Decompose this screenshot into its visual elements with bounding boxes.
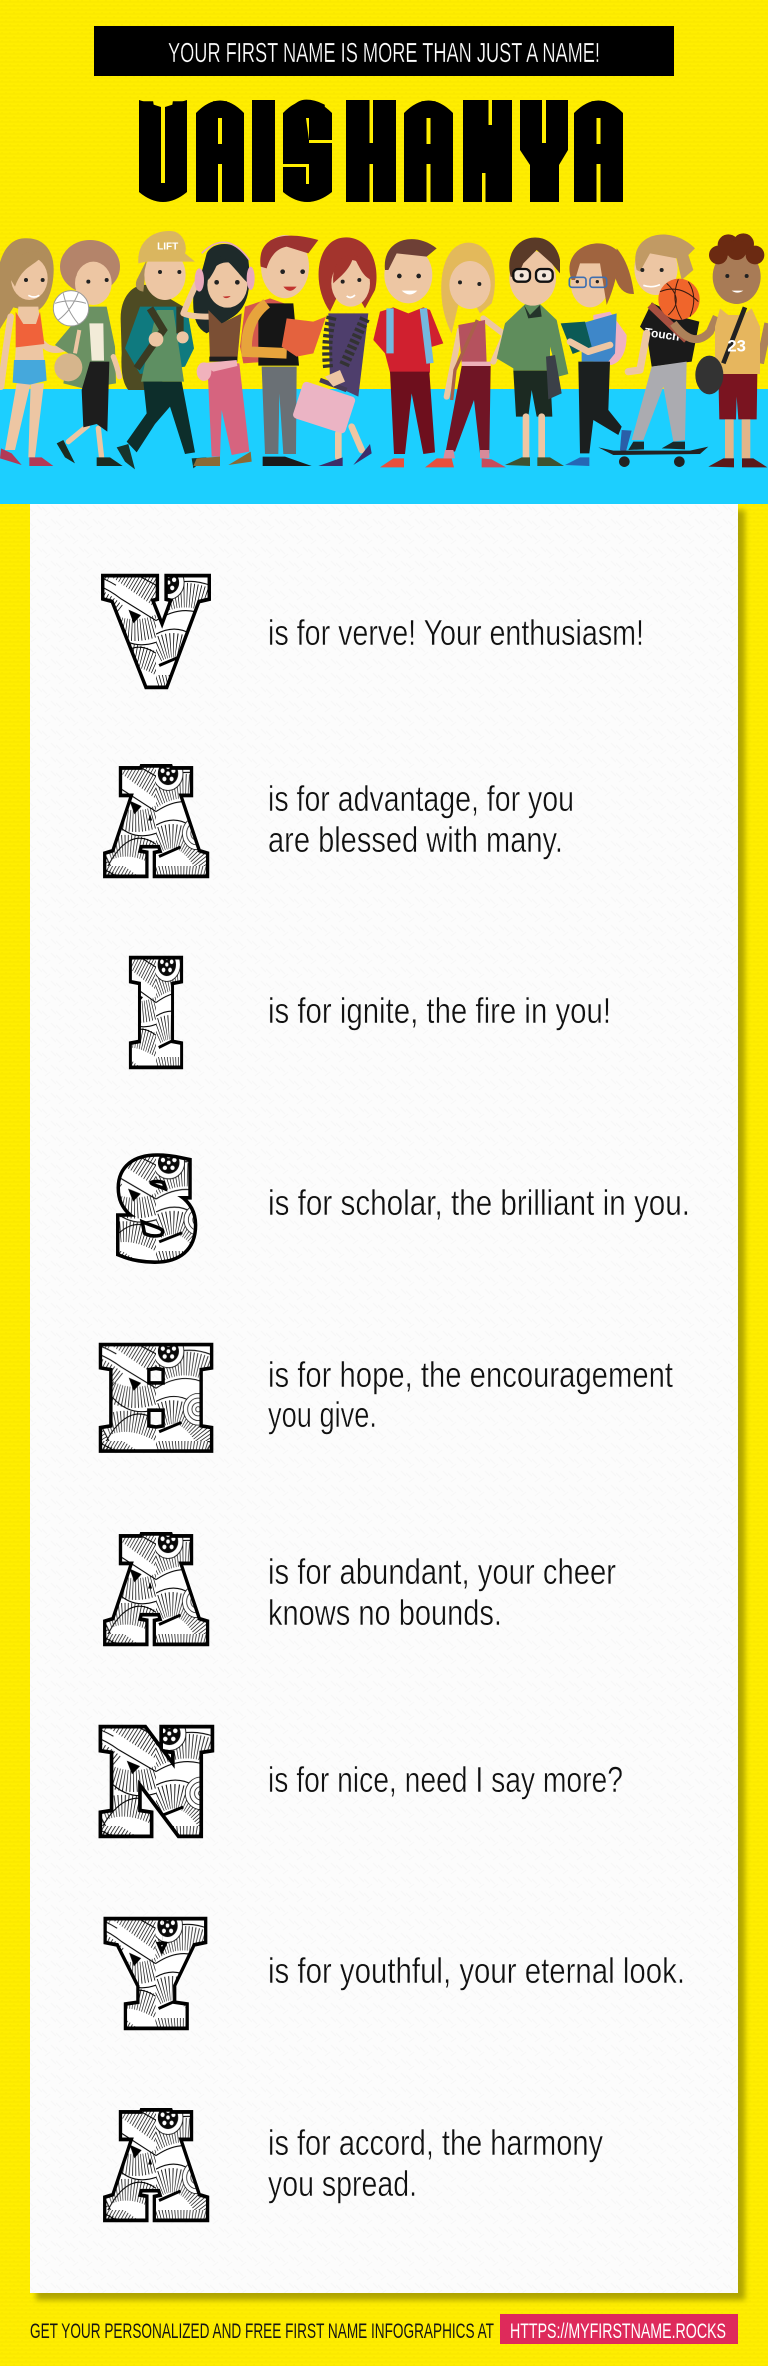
letter A row bbox=[113, 745, 574, 896]
letter V row bbox=[111, 555, 644, 705]
white content panel bbox=[30, 504, 745, 2300]
icon: doodle letter V: V bbox=[111, 555, 201, 705]
person 11: skateboarder with basketball bbox=[598, 235, 708, 467]
icon: doodle letter A: A bbox=[113, 745, 199, 896]
name title: H bbox=[343, 78, 399, 230]
text: A lines: are blessed with many. bbox=[268, 819, 563, 860]
name title: A bbox=[577, 77, 620, 229]
letter N row bbox=[108, 1706, 623, 1856]
person 3: boy with cap and backpack: LIFT bbox=[157, 241, 178, 252]
footer call to action: GET YOUR PERSONALIZED AND FREE FIRST NAME INFOGRAPHICS AT bbox=[30, 2319, 494, 2343]
name title: N bbox=[462, 77, 513, 229]
person 8: blonde girl bbox=[441, 243, 506, 467]
illustration: group of young people, right half bbox=[373, 233, 768, 467]
footer bbox=[30, 2314, 738, 2344]
person 9: boy with glasses bbox=[497, 238, 568, 466]
footer url badge bbox=[500, 2314, 738, 2344]
icon: doodle letter Y: Y bbox=[112, 1897, 199, 2048]
icon: doodle letter A: A bbox=[113, 2089, 199, 2240]
name title: I bbox=[252, 79, 275, 230]
person 12: boy with curly hair and tank top bbox=[673, 233, 768, 467]
person 6: girl with pink case bbox=[292, 237, 377, 466]
icon: doodle letter A: A bbox=[113, 1513, 199, 1664]
text: Y line: is for youthful, your eternal look. bbox=[268, 1950, 685, 1991]
letter H row bbox=[108, 1323, 673, 1470]
letter A row 3 bbox=[113, 2089, 603, 2240]
person 11: skateboarder with basketball: Touch bbox=[644, 325, 681, 344]
text: I line: is for ignite, the fire in you! bbox=[268, 990, 611, 1031]
black tagline bar bbox=[94, 26, 674, 76]
icon: doodle letter I: I bbox=[135, 936, 177, 1087]
text: A lines bbox=[268, 2122, 603, 2204]
person 5: boy with book bbox=[240, 235, 326, 466]
icon: doodle letter H: H bbox=[108, 1323, 204, 1470]
text: A lines: is for accord, the harmony bbox=[268, 2122, 603, 2163]
icon: doodle letter A: A bbox=[113, 1513, 199, 1664]
illustration: group of young people, left half bbox=[0, 231, 377, 469]
header banner bbox=[94, 26, 674, 230]
text: A lines: you spread. bbox=[268, 2163, 417, 2204]
icon: doodle letter Y: Y bbox=[112, 1897, 199, 2048]
text: A lines bbox=[268, 1551, 616, 1633]
person 12: boy with curly hair and tank top: 23 bbox=[727, 337, 746, 356]
person 2: girl with volleyball bbox=[53, 240, 123, 466]
letter A row 2 bbox=[113, 1513, 616, 1664]
name title: V bbox=[142, 79, 184, 229]
letter S row bbox=[121, 1135, 690, 1279]
name title bbox=[139, 77, 623, 230]
blue floor band bbox=[0, 389, 768, 504]
text: A lines: knows no bounds. bbox=[268, 1592, 502, 1633]
text: A lines bbox=[268, 778, 574, 860]
icon: doodle letter H: H bbox=[108, 1323, 204, 1470]
icon: doodle letter V: V bbox=[111, 555, 201, 705]
icon: doodle letter N: N bbox=[108, 1706, 204, 1856]
letter I row bbox=[135, 936, 611, 1087]
text: A lines: is for abundant, your cheer bbox=[268, 1551, 616, 1592]
icon: doodle letter A: A bbox=[113, 745, 199, 896]
name title: Y bbox=[523, 77, 565, 229]
text: A lines: is for advantage, for you bbox=[268, 778, 574, 819]
text: V line: is for verve! Your enthusiasm! bbox=[268, 612, 644, 653]
person 10: girl with ponytail and tablet bbox=[561, 243, 634, 466]
icon: doodle letter S: S bbox=[121, 1135, 191, 1279]
letter Y row bbox=[112, 1897, 685, 2048]
icon: doodle letter N: N bbox=[108, 1706, 204, 1856]
text: H lines bbox=[268, 1354, 673, 1435]
name title: S bbox=[283, 79, 332, 229]
name title: A bbox=[407, 77, 450, 229]
person 4: girl with headphones bbox=[183, 242, 255, 466]
text: N line: is for nice, need I say more? bbox=[268, 1759, 623, 1800]
person 7: boy in red tee bbox=[373, 239, 454, 467]
name title: A bbox=[198, 77, 242, 229]
icon: doodle letter I: I bbox=[135, 936, 177, 1087]
icon: doodle letter A: A bbox=[113, 2089, 199, 2240]
text: H lines: you give. bbox=[268, 1394, 377, 1435]
text: S line: is for scholar, the brilliant in you. bbox=[268, 1182, 690, 1223]
icon: doodle letter S: S bbox=[121, 1135, 191, 1279]
person 1: girl in orange top bbox=[0, 238, 78, 466]
text: H lines: is for hope, the encouragement bbox=[268, 1354, 673, 1395]
person 3: boy with cap and backpack bbox=[117, 231, 207, 469]
